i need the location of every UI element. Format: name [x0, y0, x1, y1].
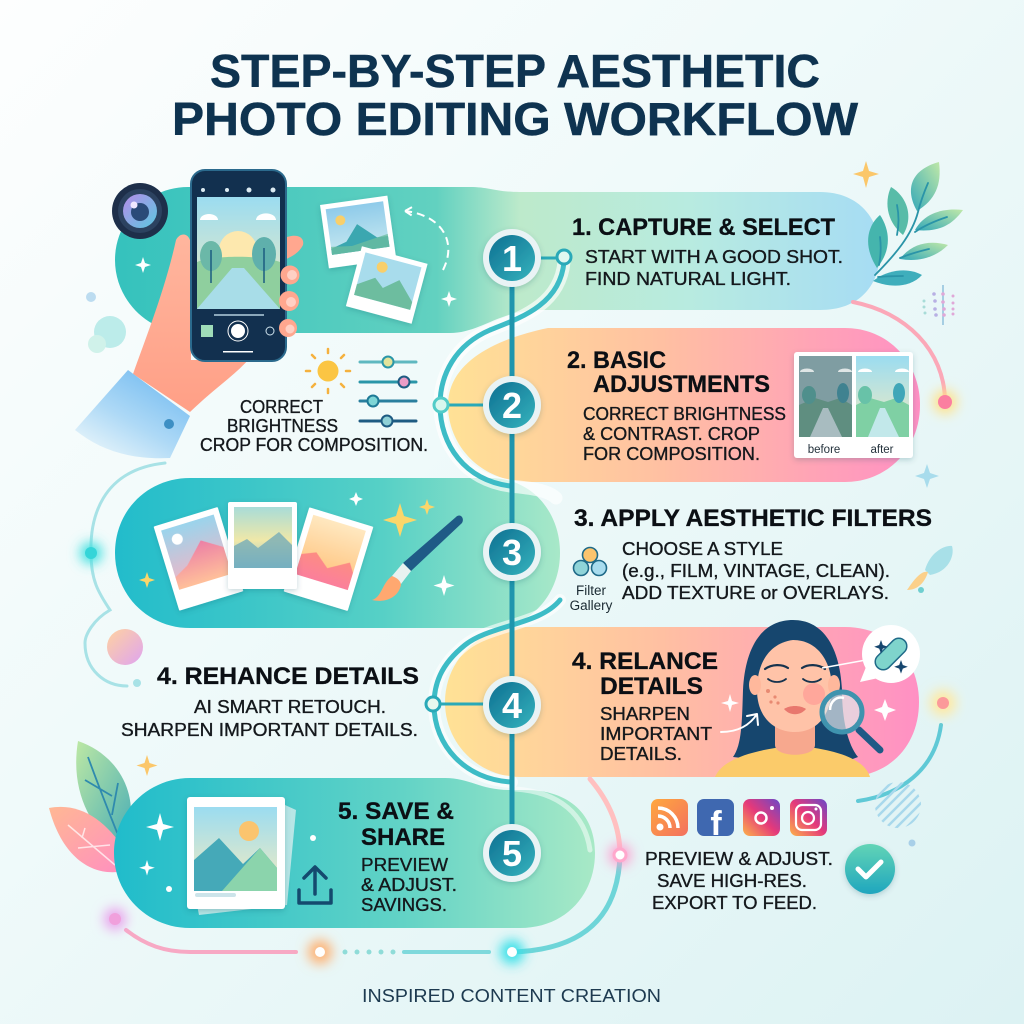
text: step 5: SAVINGS. — [361, 895, 447, 915]
text: save caption: EXPORT TO FEED. — [652, 893, 817, 913]
text: relance details: SHARPEN — [600, 704, 690, 724]
icon: filter gallery: Filter — [576, 583, 607, 598]
icon: hand holding phone — [75, 170, 303, 458]
icon: bandage bubble — [822, 625, 920, 683]
sparkles on step 1 — [135, 257, 457, 307]
number badge 3: 3 — [502, 532, 522, 573]
text: step 5: & ADJUST. — [361, 875, 457, 895]
icon: blue sparkle — [915, 464, 939, 488]
text: save caption: PREVIEW & ADJUST. — [645, 849, 833, 869]
text: save caption: SAVE HIGH-RES. — [657, 871, 807, 891]
number badge 4 — [483, 676, 541, 734]
text: step 3: 3. APPLY AESTHETIC FILTERS — [574, 505, 932, 532]
icon: paintbrush — [372, 516, 463, 601]
text: step 2: & CONTRAST. CROP — [583, 424, 760, 444]
sparkles on step 4 — [721, 694, 896, 721]
before and after card — [794, 352, 913, 458]
title — [172, 45, 859, 145]
text: step 2: CORRECT BRIGHTNESS — [583, 404, 786, 424]
icon: RSS — [651, 799, 688, 836]
number badge 1: 1 — [502, 238, 522, 279]
text: step 5 — [338, 798, 457, 915]
text: step 5: PREVIEW — [361, 855, 448, 875]
icon: sun — [306, 349, 350, 393]
icon: Facebook — [697, 799, 734, 843]
arrow: dashed return — [405, 206, 448, 270]
text: relance details: 4. RELANCE — [572, 648, 718, 675]
number badge 2: 2 — [502, 385, 522, 426]
text: step 3 — [574, 505, 932, 603]
before photo — [799, 356, 852, 437]
icon: camera lens — [112, 183, 168, 239]
text: step 5: 5. SAVE & — [338, 798, 454, 825]
number badge 5: 5 — [502, 833, 522, 874]
icon: polaroid photos — [320, 196, 428, 324]
icon: smartphone — [191, 170, 286, 361]
icon: framed photo — [187, 797, 296, 915]
icon: filter gallery — [570, 548, 613, 613]
connector nodes — [80, 250, 957, 964]
text: rehance details: AI SMART RETOUCH. — [194, 697, 386, 717]
after photo — [856, 356, 909, 437]
icon: leaves top right — [868, 162, 963, 286]
icon: Instagram outline — [790, 799, 827, 836]
icon: Facebook: f — [710, 805, 722, 843]
icon: Instagram flat — [743, 799, 780, 836]
text: save caption — [645, 849, 833, 913]
text: step 3: (e.g., FILM, VINTAGE, CLEAN). — [622, 561, 890, 581]
number badge 5 — [483, 824, 541, 882]
text: step 5: SHARE — [361, 824, 445, 851]
icon: filter gallery: Gallery — [570, 598, 613, 613]
text: step 2: ADJUSTMENTS — [593, 371, 770, 398]
text: step 1: START WITH A GOOD SHOT. — [585, 247, 843, 267]
text: rehance details: 4. REHANCE DETAILS — [157, 663, 419, 690]
panel: step 3 band — [115, 478, 560, 628]
number badge 3 — [483, 523, 541, 581]
before and after card: before — [808, 444, 840, 456]
text: step 1: FIND NATURAL LIGHT. — [585, 269, 791, 289]
polaroid centre — [228, 502, 297, 589]
decorative pixel dots — [922, 285, 954, 325]
polaroid left — [154, 507, 243, 611]
icon: colour drop — [907, 546, 953, 593]
step 3 polaroids — [154, 502, 373, 611]
panel: step 5 band — [114, 778, 595, 928]
text: step 2 — [567, 347, 786, 464]
icon: magnifier — [822, 692, 880, 750]
text: left caption step 2: CROP FOR COMPOSITION. — [200, 435, 428, 455]
flow connectors — [85, 258, 945, 952]
text: step 2: FOR COMPOSITION. — [583, 444, 760, 464]
icon: check badge — [845, 844, 895, 894]
text: left caption step 2 — [200, 397, 428, 455]
panel: step 2 band — [448, 328, 920, 482]
panel: step 1 band — [115, 187, 880, 333]
icon: upload — [299, 867, 331, 903]
text: relance details: DETAILS. — [600, 744, 682, 764]
text: step 2: 2. BASIC — [567, 347, 666, 374]
text: step 3: CHOOSE A STYLE — [622, 539, 783, 559]
icon: leaves bottom left — [49, 741, 131, 872]
panel: step 4 band — [445, 627, 919, 777]
text: rehance details: SHARPEN IMPORTANT DETAILS. — [121, 720, 418, 740]
number badge 4: 4 — [502, 685, 522, 726]
text: rehance details — [121, 663, 419, 740]
text: left caption step 2: BRIGHTNESS — [227, 416, 338, 436]
number badge 2 — [483, 376, 541, 434]
text: relance details: IMPORTANT — [600, 724, 712, 744]
title: STEP-BY-STEP AESTHETIC — [210, 45, 820, 97]
number badge 1 — [483, 229, 541, 287]
text: left caption step 2: CORRECT — [240, 397, 323, 417]
icon: gold sparkle — [853, 161, 879, 188]
decorative bubbles left — [86, 292, 143, 665]
polaroid right — [284, 507, 373, 611]
text: relance details: DETAILS — [600, 673, 703, 700]
text: relance details — [572, 648, 718, 764]
before and after card: after — [870, 444, 894, 456]
text: step 3: ADD TEXTURE or OVERLAYS. — [622, 583, 889, 603]
decorative striped circle — [875, 782, 921, 828]
icon: gold star — [136, 755, 158, 776]
sparkles on step 5 — [139, 813, 316, 892]
sparkles on step 3 — [139, 492, 454, 596]
text: step 1 — [572, 214, 843, 289]
text: step 1: 1. CAPTURE & SELECT — [572, 214, 835, 241]
illustration: woman portrait — [715, 620, 870, 777]
icon: adjustment sliders — [360, 356, 416, 426]
footer text: INSPIRED CONTENT CREATION — [362, 986, 661, 1006]
title: PHOTO EDITING WORKFLOW — [172, 93, 859, 145]
arrow: to face — [721, 714, 758, 732]
